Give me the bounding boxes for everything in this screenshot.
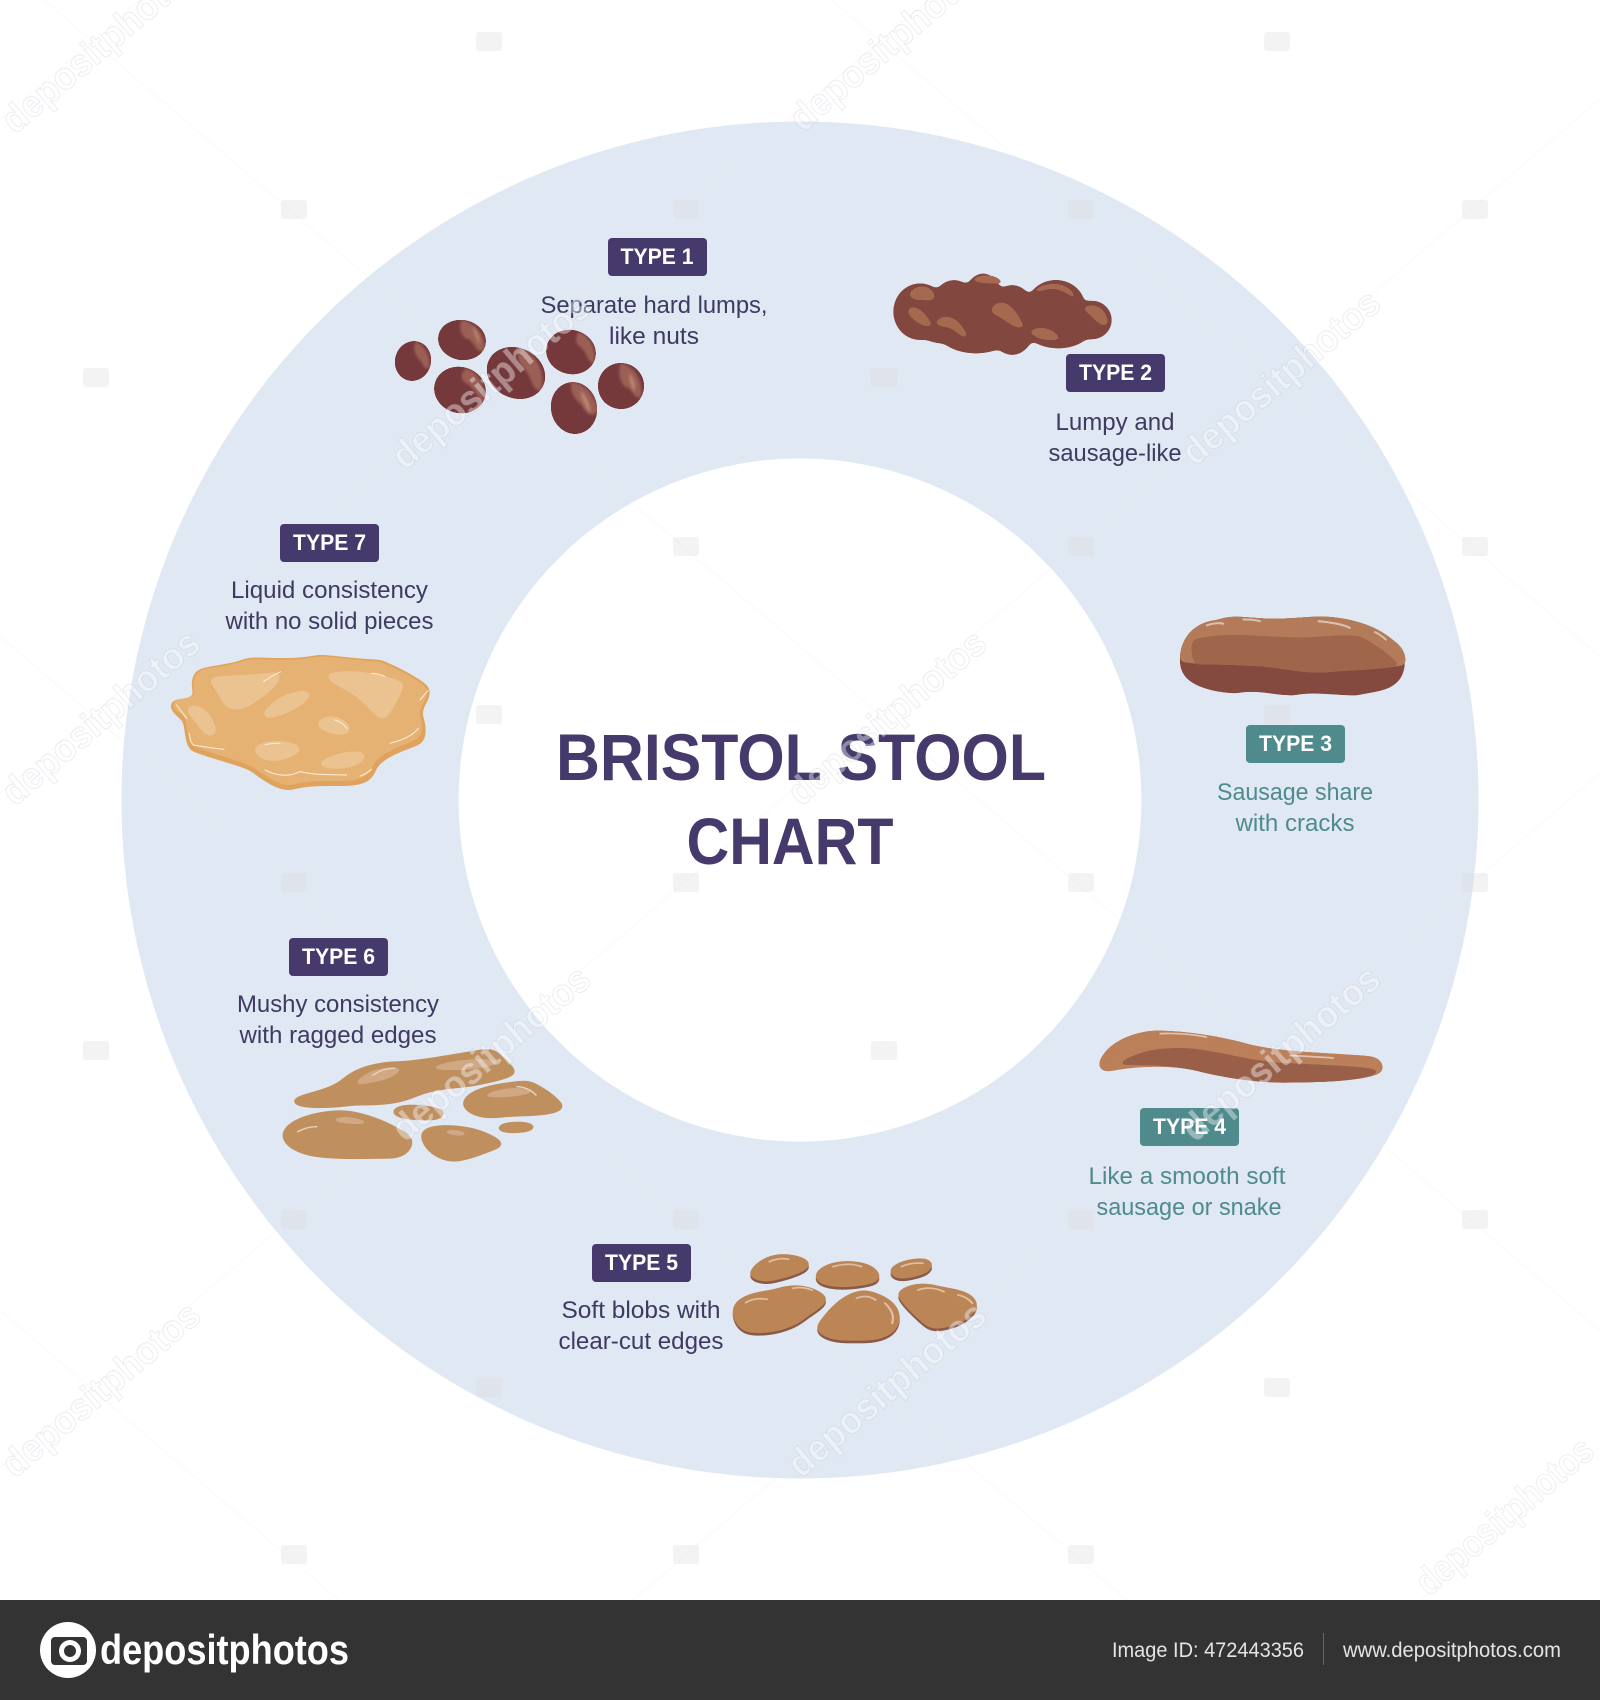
watermark text: depositphotos [1174, 282, 1389, 474]
icon: cracked sausage [1180, 617, 1406, 695]
footer website: www.depositphotos.com [1342, 1639, 1561, 1662]
badge: type 3 [1246, 725, 1345, 763]
icon: soft blobs [733, 1254, 977, 1343]
title: BRISTOL STOOL [556, 720, 1046, 794]
panel: type 5 [558, 1244, 977, 1355]
badge: type 4: TYPE 4 [1153, 1114, 1227, 1139]
panel: type 3 [1180, 617, 1406, 837]
panel: type 1 [390, 238, 768, 438]
badge: type 2: TYPE 2 [1079, 360, 1152, 385]
badge: type 2 [1066, 354, 1165, 392]
icon: separate hard lumps [390, 316, 648, 438]
description: type 7 [225, 577, 434, 635]
watermark text: depositphotos [780, 622, 995, 814]
footer brand name: depositphotos [100, 1626, 349, 1673]
icon: liquid puddle [170, 655, 430, 790]
description: type 6: with ragged edges [238, 1022, 436, 1049]
badge: type 6 [289, 938, 388, 976]
description: type 6 [237, 991, 439, 1049]
description: type 5: clear-cut edges [558, 1328, 724, 1355]
description: type 5 [558, 1297, 724, 1355]
panel: type 4 [1088, 1031, 1383, 1221]
description: type 3: Sausage share [1217, 779, 1373, 806]
watermark text: depositphotos [1174, 958, 1389, 1150]
watermark text: depositphotos [384, 958, 599, 1150]
description: type 1: Separate hard lumps, [540, 292, 768, 319]
icon: mushy pieces [283, 1048, 564, 1162]
watermark text: depositphotos [780, 1294, 995, 1486]
panel: type 7 [170, 524, 434, 790]
icon: lumpy sausage [893, 273, 1112, 355]
watermark text: depositphotos [384, 286, 599, 478]
description: type 3: with cracks [1234, 810, 1354, 837]
panel: type 6 [237, 938, 564, 1162]
badge: type 5 [592, 1244, 691, 1282]
panel: type 2 [893, 273, 1182, 467]
description: type 7: Liquid consistency [231, 577, 428, 604]
icon: smooth snake [1099, 1031, 1383, 1082]
watermark text: depositphotos [0, 622, 209, 814]
badge: type 4 [1140, 1108, 1239, 1146]
badge: type 1: TYPE 1 [620, 244, 694, 269]
watermark text: depositphotos [0, 1294, 209, 1486]
icon: footer camera logo [40, 1622, 96, 1678]
title [556, 720, 1046, 878]
badge: type 3: TYPE 3 [1259, 731, 1332, 756]
watermark camera icons [83, 32, 1488, 1564]
badge: type 7 [280, 524, 379, 562]
ring background [122, 122, 1478, 1479]
footer image id: Image ID: 472443356 [1112, 1639, 1304, 1662]
description: type 4: sausage or snake [1096, 1194, 1282, 1221]
description: type 1 [540, 292, 768, 350]
description: type 6: Mushy consistency [237, 991, 439, 1018]
description: type 2: Lumpy and [1056, 409, 1174, 436]
description: type 2 [1048, 409, 1182, 467]
badge: type 6: TYPE 6 [302, 944, 375, 969]
badge: type 7: TYPE 7 [293, 530, 366, 555]
description: type 4: Like a smooth soft [1088, 1163, 1286, 1190]
description: type 3 [1217, 779, 1373, 837]
description: type 1: like nuts [609, 323, 699, 350]
description: type 5: Soft blobs with [562, 1297, 720, 1324]
footer bar [0, 1600, 1600, 1700]
badge: type 1 [608, 238, 707, 276]
badge: type 5: TYPE 5 [605, 1250, 678, 1275]
description: type 7: with no solid pieces [225, 608, 434, 635]
title: CHART [686, 804, 894, 878]
description: type 4 [1088, 1163, 1286, 1221]
description: type 2: sausage-like [1048, 440, 1182, 467]
